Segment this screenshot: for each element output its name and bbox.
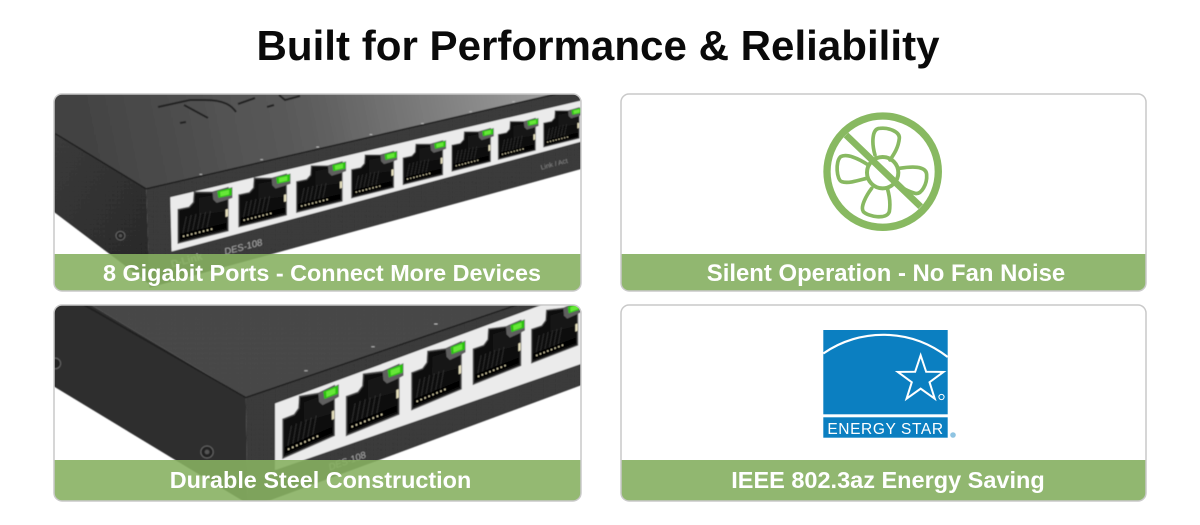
caption banner [54,460,581,501]
icon: energy star logo: ENERGY STAR [827,421,944,438]
photo: switch corner close-up: DES-108 [327,450,368,473]
caption text: Durable Steel Construction [170,467,471,493]
title: Built for Performance & Reliability [256,22,940,69]
icon: crossed-out fan [827,116,938,227]
caption text: IEEE 802.3az Energy Saving [731,467,1045,493]
icon: energy star logo [823,330,956,438]
panel: energy saving [621,305,1146,501]
caption text: 8 Gigabit Ports - Connect More Devices [103,260,541,286]
photo: switch corner close-up [50,300,586,504]
panel: 8 gigabit ports [50,87,586,291]
caption banner [54,254,581,291]
photo: switch front with eight ports [50,87,586,288]
caption text: Silent Operation - No Fan Noise [707,260,1065,287]
panel: durable steel construction [50,300,586,504]
photo: switch front with eight ports: Link / Act [540,158,569,172]
caption banner [621,460,1146,501]
photo: switch front with eight ports: DES-108 [223,237,264,258]
panel: silent operation [621,94,1146,291]
photo: switch front with eight ports: D-Link [170,252,204,270]
caption banner [621,254,1146,291]
